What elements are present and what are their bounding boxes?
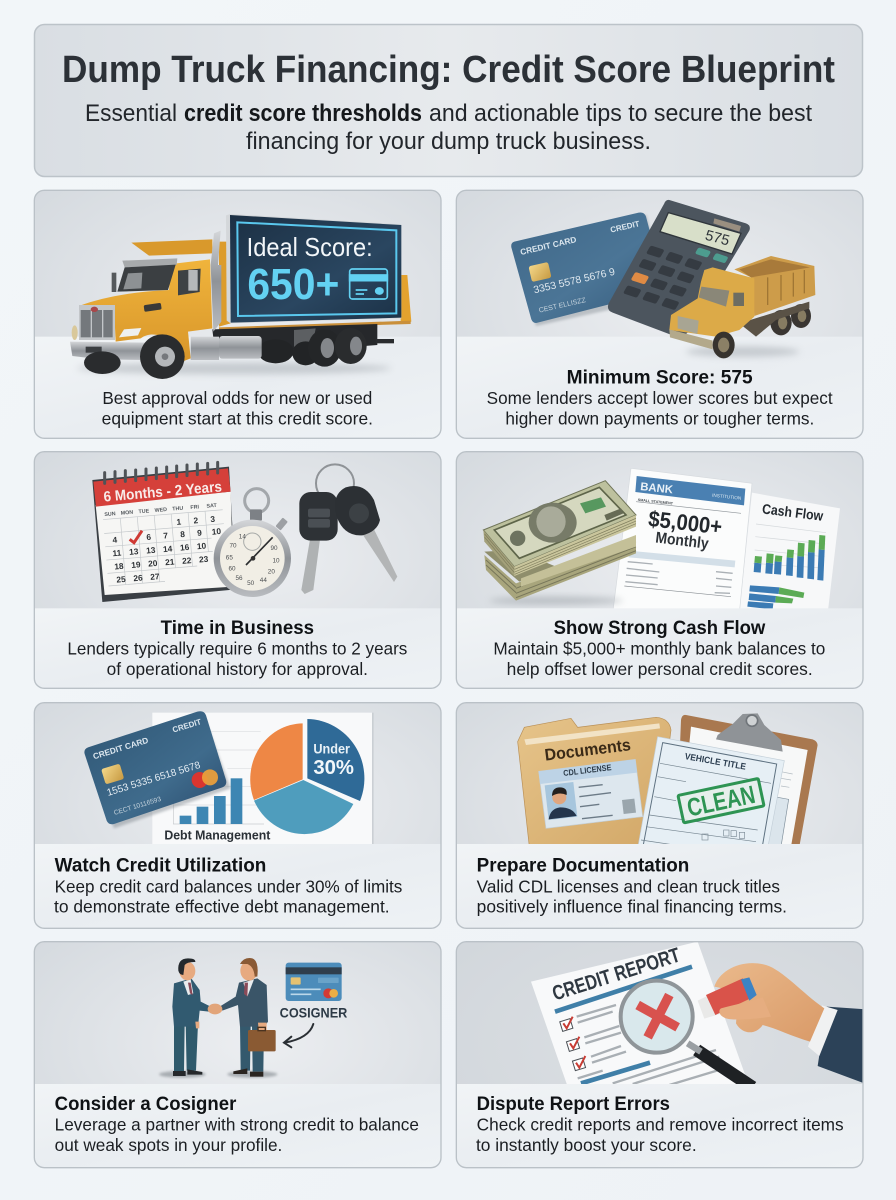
cab <box>79 259 212 362</box>
illustration: calendar: 10 <box>197 541 207 551</box>
illustration: debt management chart sheet: Debt Management <box>164 828 271 842</box>
illustration: cash flow document <box>739 493 840 613</box>
panel: consider a cosigner <box>34 942 441 1169</box>
illustration: calendar: 22 <box>182 555 192 566</box>
illustration: folder with CDL license: Documents <box>544 735 632 765</box>
illustration: calendar: 16 <box>180 542 190 553</box>
illustration: calendar: 6 <box>146 532 152 542</box>
panel: time in business <box>34 452 441 690</box>
illustration: credit card: 1553 5335 6518 5678 <box>106 760 202 799</box>
illustration: calendar: 14 <box>163 543 173 554</box>
illustration: credit card: CREDIT <box>171 717 202 735</box>
calculator: 575 <box>703 228 731 250</box>
illustration: credit report sheet: CREDIT REPORT <box>550 944 683 1005</box>
caption: time in business: Lenders typically require 6 months to 2 years <box>67 638 407 658</box>
illustration: credit report sheet <box>531 942 749 1087</box>
credit card: CREDIT <box>609 219 641 235</box>
illustration: stopwatch: 44 <box>260 577 267 584</box>
illustration: clipboard <box>676 713 818 847</box>
illustration: calendar <box>92 462 236 602</box>
illustration: credit card: CECT 10116593 <box>113 796 162 817</box>
caption: dispute errors: to instantly boost your score. <box>476 1135 697 1155</box>
caption: cash flow <box>493 618 825 679</box>
illustration: calendar: 8 <box>180 529 186 539</box>
illustration: cash flow document: Cash Flow <box>761 500 824 524</box>
caption: credit utilization: Keep credit card balances under 30% of limits <box>55 876 402 896</box>
sign <box>226 214 401 323</box>
illustration: calendar: 4 <box>112 534 118 545</box>
caption: minimum score: higher down payments or tougher terms. <box>505 408 814 428</box>
illustration: calendar: THU <box>172 506 184 513</box>
illustration: bank statement <box>613 468 752 613</box>
caption: cosigner: out weak spots in your profile. <box>55 1135 282 1155</box>
panel: dispute report errors <box>456 942 866 1169</box>
panel: show strong cash flow <box>456 452 863 690</box>
illustration: calendar: TUE <box>138 508 150 515</box>
wheels <box>84 351 121 374</box>
caption: time in business: of operational history for approval. <box>107 659 368 679</box>
illustration: calendar: 3 <box>210 514 216 524</box>
illustration: bank statement: $5,000+ <box>647 506 723 539</box>
illustration: vehicle title with clean stamp: VEHICLE TITLE <box>684 751 747 772</box>
caption: cash flow: Maintain $5,000+ monthly bank balances to <box>493 638 825 658</box>
illustration: hand with eraser <box>698 963 866 1084</box>
illustration: calendar: MON <box>121 510 134 517</box>
illustration: dump truck with score sign <box>70 214 411 379</box>
illustration: calendar: 1 <box>176 516 182 527</box>
caption: cash flow: help offset lower personal credit scores. <box>507 659 813 679</box>
illustration: magnifying glass with red X <box>621 981 753 1087</box>
caption: cash flow: Show Strong Cash Flow <box>554 618 766 639</box>
illustration: stopwatch: 90 <box>270 545 278 552</box>
illustration: calendar: 26 <box>133 573 143 583</box>
illustration: dump truck with score sign: 650+ <box>247 260 339 309</box>
grille <box>79 305 115 340</box>
bumper <box>70 342 147 360</box>
right man <box>221 958 276 1077</box>
illustration: calendar: 13 <box>129 546 139 557</box>
caption: ideal score <box>102 388 373 428</box>
illustration: bank statement: BANK <box>640 481 674 496</box>
caption: cosigner: Consider a Cosigner <box>55 1094 237 1115</box>
illustration: credit card: CREDIT CARD <box>92 735 149 761</box>
model dump truck <box>669 256 815 358</box>
illustration: calendar: 13 <box>146 545 156 555</box>
illustration: bank statement: SMALL STATEMENT <box>638 498 674 506</box>
illustration: stopwatch: 65 <box>226 554 233 561</box>
illustration: bank statement: Monthly <box>655 529 710 553</box>
illustration: stopwatch: 60 <box>228 566 236 573</box>
illustration: calendar: 21 <box>165 557 175 567</box>
header panel <box>34 24 862 176</box>
caption: documentation: Valid CDL licenses and clean truck titles <box>477 876 780 896</box>
illustration: calendar: 11 <box>112 548 122 558</box>
pie chart: under 30%: 30% <box>313 757 354 779</box>
illustration: card, calculator and truck <box>511 200 815 358</box>
subtitle: financing for your dump truck business. <box>246 128 651 155</box>
illustration: credit card <box>84 711 231 828</box>
illustration: handshake <box>159 958 277 1078</box>
illustration: vehicle title with clean stamp: CLEAN <box>685 781 758 822</box>
illustration: calendar: 6 Months - 2 Years <box>103 479 223 506</box>
pie chart: under 30%: Under <box>313 741 351 756</box>
exhaust <box>211 231 221 332</box>
caption: time in business: Time in Business <box>161 618 314 639</box>
illustration: stopwatch <box>214 489 291 597</box>
chassis <box>212 324 377 350</box>
panel: ideal score 650+ <box>34 190 441 440</box>
label: cosigner: COSIGNER <box>280 1006 347 1021</box>
caption: dispute errors: Check credit reports and remove incorrect items <box>477 1115 844 1135</box>
illustration: calendar: FRI <box>190 504 200 511</box>
illustration: stopwatch: 10 <box>272 558 280 565</box>
caption: credit utilization: to demonstrate effective debt management. <box>54 897 390 917</box>
CDL license card <box>539 759 643 828</box>
illustration: calendar: SUN <box>104 511 116 518</box>
subtitle <box>85 100 812 155</box>
illustration: stopwatch: 20 <box>268 568 275 575</box>
caption: credit utilization: Watch Credit Utilization <box>55 856 266 877</box>
title: Dump Truck Financing: Credit Score Blueprint <box>62 49 835 91</box>
illustration: stack of cash <box>483 481 636 605</box>
caption: documentation: positively influence final financing terms. <box>477 897 787 917</box>
illustration: calendar: 7 <box>163 530 169 541</box>
panel: minimum score 575 <box>456 190 863 440</box>
credit card: CEST ELLISZZ <box>538 297 587 315</box>
score text: Ideal Score: <box>247 232 373 262</box>
illustration: folder with CDL license <box>518 717 671 847</box>
illustration: calendar: 25 <box>116 574 126 585</box>
illustration: stopwatch: 14 <box>239 533 246 540</box>
illustration: calendar: SAT <box>206 503 218 510</box>
arrow <box>284 1024 313 1047</box>
credit card <box>511 212 650 326</box>
illustration: stopwatch: 50 <box>247 580 255 587</box>
caption: minimum score <box>487 367 833 428</box>
caption: credit utilization <box>54 856 402 917</box>
illustration: calendar: 9 <box>197 528 203 538</box>
caption: documentation <box>477 856 787 917</box>
left man <box>172 958 211 1076</box>
illustration: calendar: WED <box>154 507 167 514</box>
caption: time in business <box>67 618 407 679</box>
caption: cosigner <box>55 1094 419 1155</box>
illustration: calendar: 2 <box>193 515 199 525</box>
illustration: stopwatch: 56 <box>235 575 243 582</box>
CDL license card: CDL LICENSE <box>563 762 612 778</box>
illustration: calendar: 19 <box>131 559 141 570</box>
panel: prepare documentation <box>456 703 863 929</box>
illustration: debt management chart sheet <box>152 713 373 846</box>
clasped hands <box>208 1004 222 1014</box>
caption: dispute errors: Dispute Report Errors <box>477 1094 670 1115</box>
illustration: calendar: 18 <box>114 561 124 571</box>
panel: watch credit utilization <box>34 703 441 929</box>
illustration: vehicle title with clean stamp <box>638 737 784 848</box>
subtitle: and actionable tips to secure the best <box>429 100 812 127</box>
icon: credit card <box>350 269 387 299</box>
illustration: keys <box>299 464 397 594</box>
credit card: CREDIT CARD <box>519 234 577 257</box>
caption: cosigner: Leverage a partner with strong credit to balance <box>55 1115 419 1135</box>
illustration: calendar: 23 <box>199 554 209 564</box>
illustration: calendar: 27 <box>150 571 160 582</box>
subtitle: credit score thresholds <box>184 100 422 127</box>
caption: ideal score: Best approval odds for new or used <box>102 388 372 408</box>
icon: credit card <box>286 963 342 1001</box>
caption: ideal score: equipment start at this credit score. <box>102 408 373 428</box>
subtitle: Essential <box>85 100 177 127</box>
caption: documentation: Prepare Documentation <box>477 856 689 877</box>
illustration: calendar: 20 <box>148 558 158 569</box>
pie chart: under 30% <box>250 719 364 834</box>
caption: minimum score: Minimum Score: 575 <box>567 367 753 388</box>
illustration: bank statement: INSTITUTION <box>712 493 741 501</box>
illustration: stopwatch: 70 <box>229 543 237 550</box>
calculator <box>608 200 750 337</box>
caption: minimum score: Some lenders accept lower scores but expect <box>487 388 833 408</box>
illustration: calendar: 10 <box>211 526 222 537</box>
caption: dispute errors <box>476 1094 844 1155</box>
credit card: 3353 5578 5676 9 <box>533 267 616 296</box>
